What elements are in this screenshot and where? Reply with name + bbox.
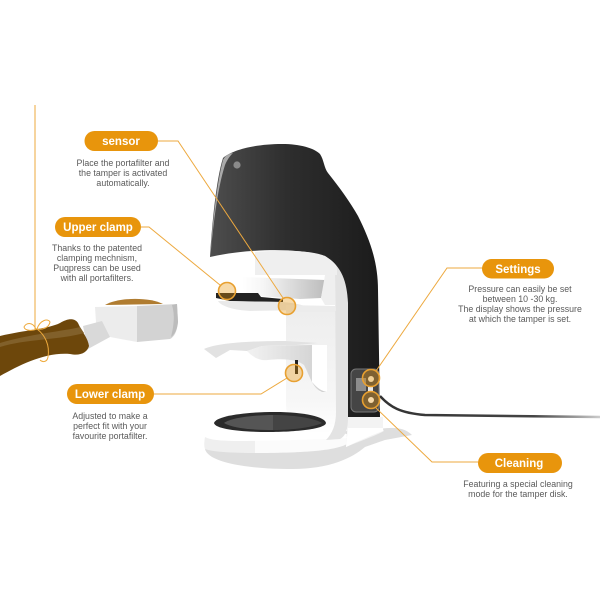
sensor dot (233, 161, 241, 169)
highlight (210, 153, 233, 255)
upper panel (255, 251, 337, 275)
power cable (380, 396, 600, 417)
white window (312, 345, 327, 392)
callout: sensor: Place the portafilter and (77, 158, 170, 168)
callout: upper clamp: with all portafilters. (60, 273, 133, 283)
connector lines (141, 141, 482, 462)
callout: sensor: the tamper is activated (79, 168, 167, 178)
black body (210, 144, 380, 417)
callout: settings: Pressure can easily be set (468, 284, 572, 294)
coffee puck (105, 299, 163, 305)
handle (0, 319, 89, 376)
callout: sensor: automatically. (96, 178, 150, 188)
ferrule (83, 321, 110, 349)
callout: lower clamp: Lower clamp (75, 389, 145, 401)
callout: lower clamp (67, 384, 154, 441)
callout markers (218, 282, 380, 408)
base underside (205, 428, 412, 469)
callout: upper clamp: Puqpress can be used (53, 263, 141, 273)
tamper machine (204, 144, 412, 469)
control panel (351, 369, 379, 412)
callout: upper clamp: Upper clamp (63, 222, 133, 234)
callout: sensor: sensor (102, 136, 140, 148)
callout: settings: Settings (495, 264, 541, 276)
drip tray (214, 412, 326, 432)
lower clamp (204, 341, 327, 392)
callout: upper clamp (52, 217, 142, 283)
callout: settings: between 10 -30 kg. (483, 294, 557, 304)
callout: cleaning: Featuring a special cleaning (463, 479, 573, 489)
callout: lower clamp: perfect fit with your (73, 421, 147, 431)
callout: upper clamp: Thanks to the patented (52, 243, 142, 253)
callout: cleaning: mode for the tamper disk. (468, 489, 568, 499)
callout: cleaning (463, 453, 573, 499)
callout: cleaning: Cleaning (495, 458, 543, 470)
callout: settings: The display shows the pressure (458, 304, 582, 314)
column (286, 311, 336, 434)
callout: sensor (77, 131, 170, 188)
string and bow (24, 105, 50, 362)
cup (95, 306, 137, 342)
base top (205, 418, 347, 441)
upper clamp (216, 275, 335, 312)
plinth (346, 417, 384, 447)
callout: settings (458, 259, 582, 324)
base front band (204, 434, 255, 453)
callout: lower clamp: favourite portafilter. (73, 431, 147, 441)
callout: settings: at which the tamper is set. (469, 314, 571, 324)
callout: lower clamp: Adjusted to make a (72, 411, 148, 421)
column right strip (326, 262, 348, 440)
callout: upper clamp: clamping mechnism, (57, 253, 137, 263)
portafilter (0, 299, 178, 376)
